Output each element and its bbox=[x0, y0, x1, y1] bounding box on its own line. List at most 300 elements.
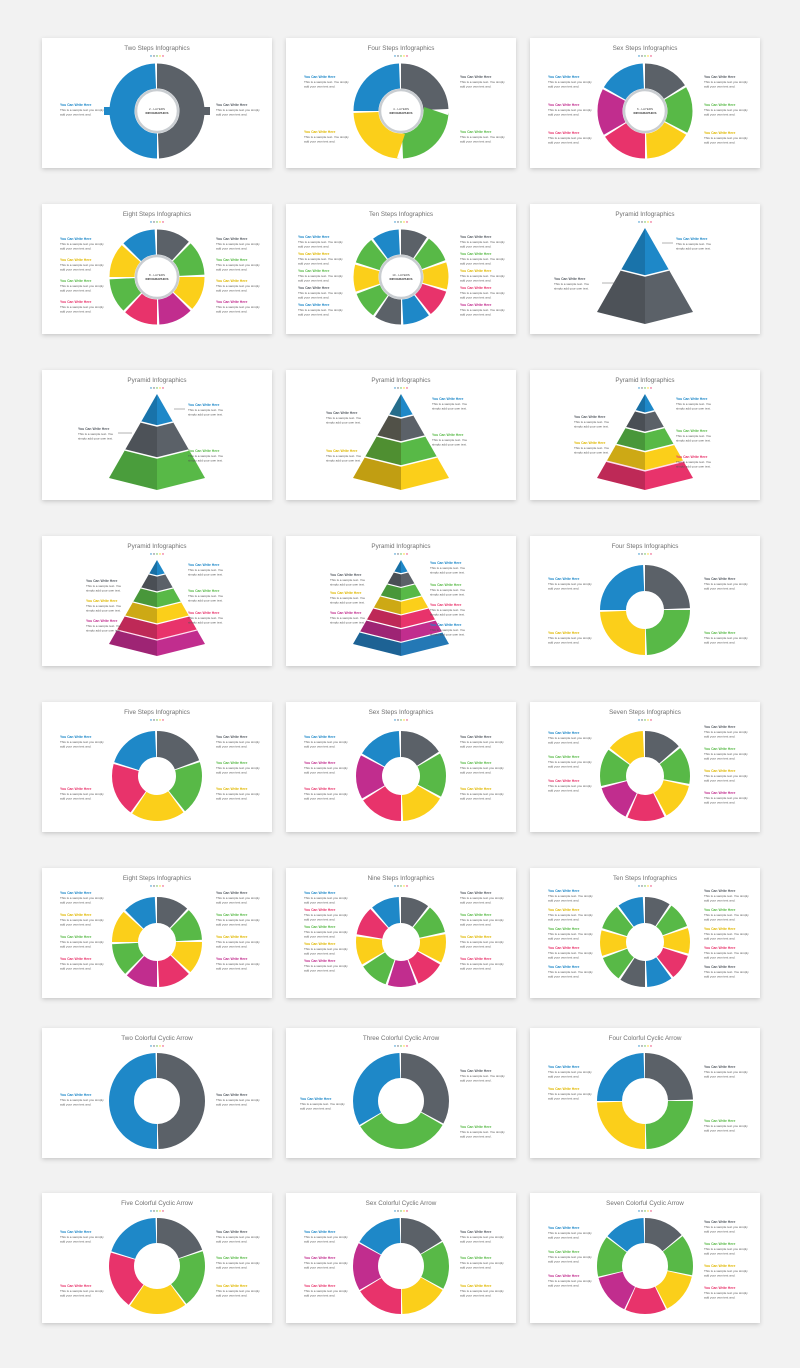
text right: This is a sample text you simply bbox=[216, 108, 260, 112]
slide: Seven Steps Infographics bbox=[530, 702, 760, 832]
title: Pyramid Infographics bbox=[615, 211, 675, 218]
text right bbox=[216, 1230, 260, 1298]
text left: add your own text and. bbox=[548, 1284, 579, 1288]
text right: This is a sample text. You simply bbox=[704, 894, 749, 898]
text right: simply add your own text. bbox=[430, 632, 465, 636]
text left: add your own text and. bbox=[548, 764, 579, 768]
text left: add your own text and. bbox=[60, 112, 91, 116]
text right: add your own text and. bbox=[216, 900, 247, 904]
text right: You Can Write Here bbox=[216, 1256, 247, 1260]
text right: add your own text and. bbox=[460, 262, 491, 266]
text left: simply add your own text. bbox=[330, 582, 365, 586]
text right bbox=[704, 1065, 748, 1132]
slide: Eight Steps Infographics: INFOGRAPHICS bbox=[145, 277, 169, 281]
slide: Pyramid 6 layers bbox=[42, 536, 272, 666]
text left: This is a sample text. You simply bbox=[548, 932, 593, 936]
title: Ten Steps Infographics bbox=[369, 211, 433, 218]
text left: You Can Write Here bbox=[304, 761, 335, 765]
text left: You Can Write Here bbox=[548, 1226, 579, 1230]
text right: This is a sample text you simply bbox=[704, 752, 748, 756]
text left: You Can Write Here bbox=[60, 1284, 91, 1288]
text right: You Can Write Here bbox=[432, 397, 463, 401]
text left: add your own text and. bbox=[548, 898, 579, 902]
text left: add your own text and. bbox=[304, 968, 335, 972]
text left: You Can Write Here bbox=[304, 735, 335, 739]
text right: You Can Write Here bbox=[460, 235, 491, 239]
text right bbox=[460, 735, 504, 800]
text left: This is a sample text you simply bbox=[304, 792, 348, 796]
text left: add your own text and. bbox=[60, 922, 91, 926]
text right: You Can Write Here bbox=[216, 1230, 247, 1234]
text right: This is a sample text you simply bbox=[216, 918, 260, 922]
text right: This is a sample text. You bbox=[676, 460, 711, 464]
text left: simply add your own text. bbox=[326, 420, 361, 424]
slide: Four Steps donut bbox=[530, 536, 760, 666]
text left: simply add your own text. bbox=[86, 608, 121, 612]
text right: simply add your own text. bbox=[430, 592, 465, 596]
title: Sex Steps Infographics bbox=[369, 709, 433, 716]
text left: simply add your own text. bbox=[78, 436, 113, 440]
text right: simply add your own text. bbox=[676, 464, 711, 468]
text right: This is a sample text. You simply bbox=[460, 308, 505, 312]
text right: add your own text and. bbox=[216, 268, 247, 272]
slide: Five Colorful Cyclic Arrow bbox=[42, 1193, 272, 1323]
text right: add your own text and. bbox=[704, 918, 735, 922]
text right: add your own text and. bbox=[460, 244, 491, 248]
text left: You Can Write Here bbox=[554, 277, 585, 281]
slide: Pyramid 7 layers bbox=[286, 536, 516, 666]
pyramid chart bbox=[353, 394, 449, 490]
text left: add your own text and. bbox=[298, 262, 329, 266]
text left: You Can Write Here bbox=[326, 411, 357, 415]
slide: Eight Steps Infographics: 8 - LAYERS bbox=[149, 273, 165, 277]
text left: add your own text and. bbox=[60, 796, 91, 800]
text left: add your own text and. bbox=[548, 140, 579, 144]
text left: You Can Write Here bbox=[574, 441, 605, 445]
text left: add your own text and. bbox=[548, 788, 579, 792]
text right: add your own text and . bbox=[460, 1134, 492, 1138]
text right: You Can Write Here bbox=[216, 1093, 247, 1097]
text left: add your own text and. bbox=[60, 744, 91, 748]
text left: You Can Write Here bbox=[60, 279, 91, 283]
text left: add your own text and. bbox=[548, 918, 579, 922]
cyclic arrow ring bbox=[610, 1230, 680, 1302]
title: Sex Colorful Cyclic Arrow bbox=[366, 1200, 437, 1207]
text right bbox=[460, 75, 505, 144]
text right: You Can Write Here bbox=[704, 946, 735, 950]
text left: This is a sample text. You bbox=[326, 454, 361, 458]
text left: This is a sample text you simply bbox=[60, 1098, 104, 1102]
title: Pyramid Infographics bbox=[371, 377, 431, 384]
text left: simply add your own text. bbox=[330, 620, 365, 624]
slide: Pyramid 3 layers bbox=[42, 370, 272, 500]
text right: This is a sample text you simply bbox=[216, 740, 260, 744]
title: Pyramid Infographics bbox=[371, 543, 431, 550]
text right: This is a sample text you simply bbox=[704, 1070, 748, 1074]
text right: This is a sample text you simply bbox=[704, 108, 748, 112]
text right: You Can Write Here bbox=[704, 1065, 735, 1069]
text left: You Can Write Here bbox=[574, 415, 605, 419]
title: Five Colorful Cyclic Arrow bbox=[121, 1200, 193, 1207]
text left: This is a sample text you simply bbox=[548, 108, 592, 112]
text right bbox=[460, 1069, 505, 1138]
text right: add your own text and. bbox=[704, 1274, 735, 1278]
text left: You Can Write Here bbox=[60, 735, 91, 739]
slide: Four Steps Infographics bbox=[286, 38, 516, 168]
text left: add your own text and. bbox=[548, 936, 579, 940]
text left: This is a sample text you simply bbox=[60, 284, 104, 288]
text left bbox=[86, 579, 121, 632]
text right: add your own text and. bbox=[460, 900, 491, 904]
text right bbox=[432, 397, 467, 446]
text left: add your own text and. bbox=[304, 952, 335, 956]
text left: You Can Write Here bbox=[548, 889, 579, 893]
text right: simply add your own text. bbox=[188, 458, 223, 462]
text left: You Can Write Here bbox=[548, 1274, 579, 1278]
ring chart bbox=[610, 76, 680, 146]
text left bbox=[304, 891, 348, 972]
text right: add your own text and. bbox=[460, 312, 491, 316]
text left: You Can Write Here bbox=[304, 1230, 335, 1234]
text left: This is a sample text. You bbox=[330, 578, 365, 582]
text right: add your own text and. bbox=[704, 756, 735, 760]
text right: simply add your own text. bbox=[188, 620, 223, 624]
text right: add your own text and. bbox=[704, 586, 735, 590]
text left: This is a sample text you simply bbox=[548, 1070, 592, 1074]
text right: You Can Write Here bbox=[704, 1242, 735, 1246]
text right: This is a sample text. You simply bbox=[460, 135, 505, 139]
pyramid chart bbox=[109, 394, 205, 490]
text right bbox=[216, 103, 260, 116]
text left: This is a sample text you simply bbox=[304, 1235, 348, 1239]
text right: You Can Write Here bbox=[704, 725, 735, 729]
text right: This is a sample text you simply bbox=[460, 962, 504, 966]
slide: Ten Steps Infographics bbox=[286, 204, 516, 334]
pyramid chart bbox=[597, 394, 693, 490]
text left: You Can Write Here bbox=[548, 965, 579, 969]
text left: This is a sample text. You simply bbox=[548, 894, 593, 898]
text right: This is a sample text. You simply bbox=[460, 1130, 505, 1134]
text right: add your own text and. bbox=[704, 1230, 735, 1234]
text left bbox=[304, 75, 349, 144]
text left: add your own text and. bbox=[304, 918, 335, 922]
text left: This is a sample text you simply bbox=[304, 766, 348, 770]
text right: This is a sample text you simply bbox=[460, 918, 504, 922]
text left: add your own text and. bbox=[300, 1106, 331, 1110]
text left: You Can Write Here bbox=[330, 591, 361, 595]
text right: You Can Write Here bbox=[216, 935, 247, 939]
text right: You Can Write Here bbox=[704, 1119, 735, 1123]
text right: You Can Write Here bbox=[704, 631, 735, 635]
text right bbox=[676, 397, 711, 468]
text right bbox=[704, 75, 748, 144]
text left: simply add your own text. bbox=[554, 286, 589, 290]
text right: You Can Write Here bbox=[460, 891, 491, 895]
text left bbox=[60, 735, 104, 800]
donut chart bbox=[369, 910, 433, 974]
text left bbox=[330, 573, 365, 624]
text left: add your own text and. bbox=[304, 934, 335, 938]
text left: This is a sample text. You bbox=[574, 446, 609, 450]
text right: This is a sample text you simply bbox=[216, 263, 260, 267]
text left bbox=[298, 235, 343, 316]
text left: add your own text and. bbox=[304, 900, 335, 904]
text left: You Can Write Here bbox=[326, 449, 357, 453]
text left: This is a sample text. You bbox=[574, 420, 609, 424]
text left: add your own text and. bbox=[298, 278, 329, 282]
text left: simply add your own text. bbox=[330, 600, 365, 604]
text left: You Can Write Here bbox=[60, 935, 91, 939]
text right: You Can Write Here bbox=[188, 449, 219, 453]
text left: You Can Write Here bbox=[548, 1065, 579, 1069]
text left: add your own text and. bbox=[548, 640, 579, 644]
donut chart bbox=[125, 910, 189, 974]
text right: add your own text and. bbox=[704, 1296, 735, 1300]
title: Pyramid Infographics bbox=[615, 377, 675, 384]
text right: add your own text and. bbox=[216, 310, 247, 314]
text left: This is a sample text you simply bbox=[548, 80, 592, 84]
text right: simply add your own text. bbox=[676, 246, 711, 250]
text left: You Can Write Here bbox=[304, 925, 335, 929]
text right: This is a sample text you simply bbox=[704, 1291, 748, 1295]
text right: You Can Write Here bbox=[216, 1284, 247, 1288]
text right: add your own text and. bbox=[216, 966, 247, 970]
text right: This is a sample text. You simply bbox=[460, 240, 505, 244]
text left: You Can Write Here bbox=[548, 946, 579, 950]
slide: Eight Steps Infographics bbox=[42, 204, 272, 334]
donut chart bbox=[613, 578, 677, 642]
text left: This is a sample text you simply bbox=[60, 740, 104, 744]
text left: This is a sample text you simply bbox=[548, 636, 592, 640]
text right: This is a sample text. You bbox=[188, 454, 223, 458]
text left: This is a sample text you simply bbox=[548, 1231, 592, 1235]
text right: This is a sample text you simply bbox=[704, 136, 748, 140]
text right: simply add your own text. bbox=[188, 412, 223, 416]
text left: This is a sample text you simply bbox=[548, 582, 592, 586]
slide: Sex Steps donut bbox=[286, 702, 516, 832]
text right: This is a sample text you simply bbox=[216, 1235, 260, 1239]
text left: This is a sample text you simply bbox=[60, 962, 104, 966]
donut chart bbox=[613, 910, 677, 974]
text left bbox=[548, 889, 593, 978]
text right: add your own text and. bbox=[704, 112, 735, 116]
text left: This is a sample text you simply bbox=[60, 108, 104, 112]
text right: You Can Write Here bbox=[704, 769, 735, 773]
text right: You Can Write Here bbox=[460, 1125, 491, 1129]
text left: You Can Write Here bbox=[330, 573, 361, 577]
text right: This is a sample text you simply bbox=[704, 582, 748, 586]
text right: This is a sample text you simply bbox=[460, 1261, 504, 1265]
text right: This is a sample text. You bbox=[430, 566, 465, 570]
text right: You Can Write Here bbox=[460, 1256, 491, 1260]
cyclic arrow ring bbox=[610, 1066, 680, 1136]
donut chart bbox=[613, 744, 677, 808]
slide: Four Steps Infographics: INFOGRAPHICS bbox=[389, 111, 413, 115]
text left: This is a sample text you simply bbox=[548, 1279, 592, 1283]
cyclic arrow ring bbox=[366, 1230, 436, 1302]
text right: This is a sample text. You simply bbox=[460, 1074, 505, 1078]
text left: This is a sample text you simply bbox=[60, 792, 104, 796]
text right: You Can Write Here bbox=[704, 103, 735, 107]
text right: This is a sample text. You bbox=[432, 402, 467, 406]
text left: You Can Write Here bbox=[548, 731, 579, 735]
text right: add your own text and. bbox=[460, 770, 491, 774]
text left: This is a sample text you simply bbox=[304, 1289, 348, 1293]
text right: This is a sample text you simply bbox=[704, 730, 748, 734]
text right: add your own text and. bbox=[216, 1240, 247, 1244]
text left: add your own text and. bbox=[60, 966, 91, 970]
text left: This is a sample text. You simply bbox=[298, 240, 343, 244]
text right: simply add your own text. bbox=[676, 438, 711, 442]
text right: You Can Write Here bbox=[460, 269, 491, 273]
text left: You Can Write Here bbox=[60, 957, 91, 961]
text right: simply add your own text. bbox=[432, 442, 467, 446]
text right: add your own text and . bbox=[460, 1078, 492, 1082]
text right: This is a sample text you simply bbox=[460, 792, 504, 796]
text right: You Can Write Here bbox=[704, 1264, 735, 1268]
text left: You Can Write Here bbox=[60, 300, 91, 304]
text left: You Can Write Here bbox=[304, 891, 335, 895]
text left: You Can Write Here bbox=[548, 927, 579, 931]
text left: This is a sample text. You simply bbox=[548, 970, 593, 974]
text right: simply add your own text. bbox=[188, 572, 223, 576]
text right: You Can Write Here bbox=[460, 957, 491, 961]
pyramid chart bbox=[109, 560, 205, 656]
text left: This is a sample text. You bbox=[554, 282, 589, 286]
text left: You Can Write Here bbox=[548, 103, 579, 107]
text right: This is a sample text. You simply bbox=[704, 913, 749, 917]
text right: You Can Write Here bbox=[188, 589, 219, 593]
text left: This is a sample text you simply bbox=[60, 896, 104, 900]
text right: add your own text and. bbox=[704, 898, 735, 902]
text right: add your own text and. bbox=[460, 278, 491, 282]
text right: You Can Write Here bbox=[704, 75, 735, 79]
text left: You Can Write Here bbox=[298, 235, 329, 239]
text right: You Can Write Here bbox=[704, 791, 735, 795]
text left: This is a sample text you simply bbox=[548, 760, 592, 764]
text right: add your own text and. bbox=[216, 944, 247, 948]
text left: add your own text and. bbox=[60, 1102, 91, 1106]
text right: This is a sample text you simply bbox=[460, 940, 504, 944]
text left: You Can Write Here bbox=[298, 303, 329, 307]
text left bbox=[548, 731, 592, 792]
text left: simply add your own text. bbox=[326, 458, 361, 462]
text left: add your own text and. bbox=[304, 1240, 335, 1244]
text right: add your own text and. bbox=[216, 246, 247, 250]
text left: You Can Write Here bbox=[304, 1284, 335, 1288]
text left: You Can Write Here bbox=[548, 755, 579, 759]
text right: This is a sample text. You bbox=[676, 402, 711, 406]
text left: You Can Write Here bbox=[86, 619, 117, 623]
text right bbox=[460, 891, 504, 970]
text left bbox=[548, 577, 592, 644]
text left: You Can Write Here bbox=[60, 1230, 91, 1234]
text right: This is a sample text you simply bbox=[216, 1289, 260, 1293]
title: Eight Steps Infographics bbox=[123, 875, 191, 882]
text left bbox=[60, 103, 104, 116]
text right: add your own text and. bbox=[216, 744, 247, 748]
text left: add your own text and. bbox=[548, 740, 579, 744]
text left: This is a sample text. You simply bbox=[304, 80, 349, 84]
text left: You Can Write Here bbox=[548, 631, 579, 635]
text right: You Can Write Here bbox=[216, 787, 247, 791]
text right: You Can Write Here bbox=[460, 303, 491, 307]
text left: This is a sample text you simply bbox=[304, 930, 348, 934]
slide: Pyramid 2 layers bbox=[530, 204, 760, 334]
text left: add your own text and. bbox=[60, 246, 91, 250]
text right: This is a sample text you simply bbox=[216, 766, 260, 770]
text left bbox=[574, 415, 609, 454]
text right: You Can Write Here bbox=[704, 747, 735, 751]
text right: You Can Write Here bbox=[216, 237, 247, 241]
text right bbox=[704, 577, 748, 644]
text right: This is a sample text you simply bbox=[460, 1289, 504, 1293]
text left: You Can Write Here bbox=[548, 75, 579, 79]
text right: This is a sample text. You simply bbox=[704, 932, 749, 936]
text left: add your own text and. bbox=[298, 244, 329, 248]
text right: You Can Write Here bbox=[460, 913, 491, 917]
title: Nine Steps Infographics bbox=[368, 875, 434, 882]
text left: simply add your own text. bbox=[574, 450, 609, 454]
text left bbox=[60, 1230, 104, 1298]
text right: add your own text and. bbox=[704, 1128, 735, 1132]
text left: add your own text and. bbox=[548, 84, 579, 88]
text right: You Can Write Here bbox=[704, 1220, 735, 1224]
text left: simply add your own text. bbox=[574, 424, 609, 428]
text left: add your own text and. bbox=[60, 310, 91, 314]
title: Eight Steps Infographics bbox=[123, 211, 191, 218]
text left: You Can Write Here bbox=[330, 611, 361, 615]
text left: simply add your own text. bbox=[86, 628, 121, 632]
text left: add your own text and. bbox=[60, 268, 91, 272]
text right: You Can Write Here bbox=[704, 908, 735, 912]
title: Pyramid Infographics bbox=[127, 543, 187, 550]
text right: This is a sample text you simply bbox=[704, 774, 748, 778]
text right: This is a sample text you simply bbox=[704, 796, 748, 800]
text right: This is a sample text. You bbox=[432, 438, 467, 442]
text right: You Can Write Here bbox=[216, 279, 247, 283]
text left: You Can Write Here bbox=[60, 237, 91, 241]
slide: Ten Steps donut bbox=[530, 868, 760, 998]
text left: This is a sample text. You bbox=[330, 596, 365, 600]
ring chart bbox=[122, 242, 192, 312]
text right: You Can Write Here bbox=[460, 761, 491, 765]
text left: add your own text and. bbox=[304, 1266, 335, 1270]
text left: This is a sample text. You bbox=[330, 616, 365, 620]
slide: Pyramid 5 layers bbox=[530, 370, 760, 500]
text left: add your own text and. bbox=[298, 296, 329, 300]
slide: Pyramid 4 layers bbox=[286, 370, 516, 500]
text right: This is a sample text. You simply bbox=[460, 257, 505, 261]
slide: Seven Colorful Cyclic Arrow bbox=[530, 1193, 760, 1323]
text right: add your own text and. bbox=[460, 796, 491, 800]
title: Seven Colorful Cyclic Arrow bbox=[606, 1200, 684, 1207]
text right: This is a sample text. You bbox=[188, 616, 223, 620]
text left: You Can Write Here bbox=[548, 779, 579, 783]
text left: add your own text and. bbox=[548, 956, 579, 960]
text left: You Can Write Here bbox=[60, 787, 91, 791]
text right: You Can Write Here bbox=[676, 397, 707, 401]
text right bbox=[174, 403, 223, 462]
text right bbox=[662, 237, 711, 250]
text right bbox=[704, 725, 748, 804]
text right: simply add your own text. bbox=[188, 598, 223, 602]
text left: This is a sample text. You simply bbox=[298, 291, 343, 295]
text left: You Can Write Here bbox=[304, 908, 335, 912]
text right: This is a sample text. You bbox=[430, 628, 465, 632]
text left: You Can Write Here bbox=[300, 1097, 331, 1101]
text left: add your own text and. bbox=[60, 288, 91, 292]
